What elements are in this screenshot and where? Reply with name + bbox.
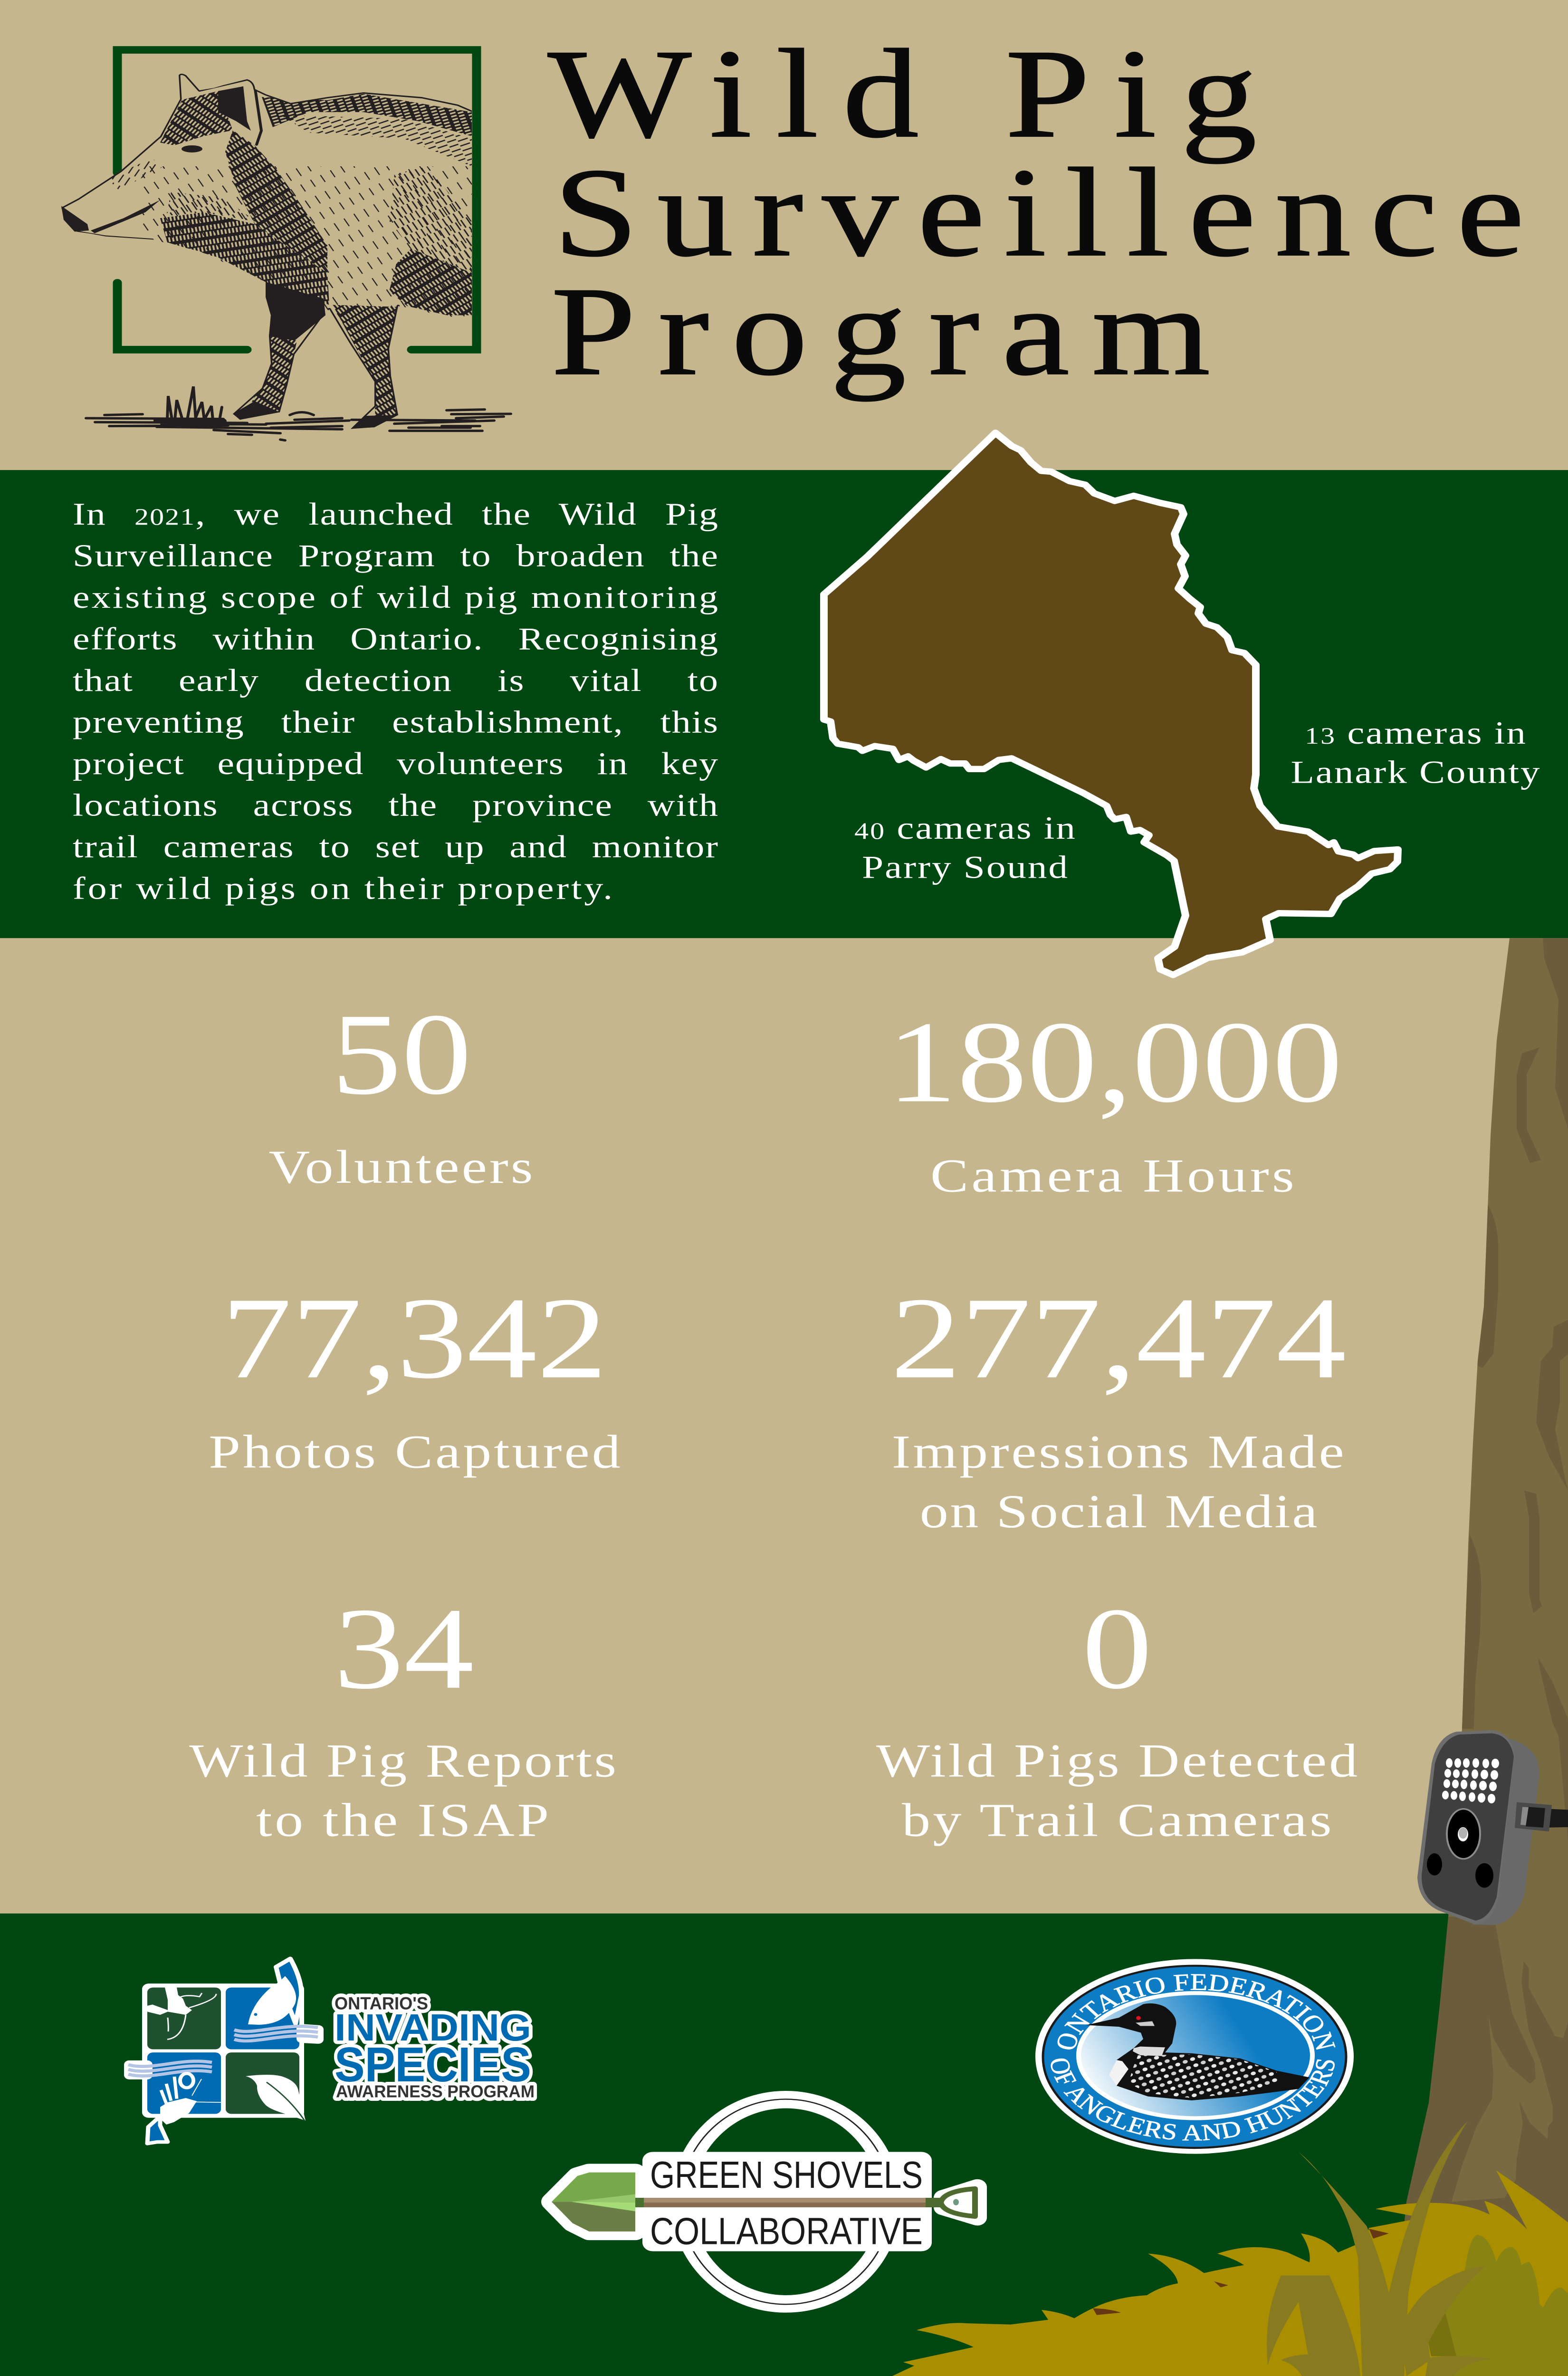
stat: photos captured [209,1273,623,1478]
stat: photos captured: 77,342 [221,1273,607,1403]
stat: social media impressions: 277,474 [891,1273,1346,1403]
introduction paragraph: that early detection is vital to [73,662,719,698]
stat: wild pigs detected [876,1584,1360,1846]
GSC wordmark [650,2154,923,2252]
title: Program [551,261,1210,402]
pig: front leg hatching [252,336,297,412]
grass: brown spots [1093,2229,1389,2315]
introduction paragraph: trail cameras to set up and monitor [73,829,719,864]
map label: Parry Sound: 40 cameras in [854,811,1077,846]
camera sensors [1427,1853,1493,1887]
ISAP wordmark: INVADING [335,2006,531,2049]
wild pig [61,74,472,429]
logo: Ontario Federation of Anglers and Hunters [1035,1959,1354,2154]
pig: rump hatching [390,166,472,273]
trail camera [1417,1730,1568,1925]
GSC ring [680,2099,891,2304]
stat: wild pigs detected: by Trail Cameras [902,1794,1334,1846]
ISAP wordmark: ONTARIO'S [335,1993,428,2013]
panel: introduction band [0,470,1568,938]
stat: social media impressions: Impressions Made [892,1426,1346,1478]
pig: scattered body hair [143,166,472,317]
pig: mane hatching [225,130,327,273]
OFAH circular lettering [1043,1969,1342,2146]
camera strap [1548,1809,1568,1828]
pig: back hatching [262,94,472,136]
grass: tall blades [1267,2121,1492,2376]
stat: volunteers: 50 [332,989,471,1119]
stat: wild pigs detected: 0 [1082,1584,1152,1713]
title: Surveillence [554,142,1524,283]
pig: tusk [118,202,131,218]
frame [117,50,477,350]
stat: social media impressions: on Social Media [920,1485,1319,1538]
ISAP wordmark [335,1993,535,2101]
grass [892,2121,1568,2376]
camera lens [1447,1809,1480,1859]
logo: Ontario's Invading Species Awareness Program [128,1959,535,2144]
camera face [1422,1734,1514,1921]
GSC text plate [642,2152,932,2251]
map label: Lanark County: 13 cameras in [1305,716,1527,751]
pig: muzzle hatching [107,158,164,190]
GSC wordmark: COLLABORATIVE [650,2210,923,2252]
stat: wild pigs detected: Wild Pigs Detected [876,1734,1360,1787]
introduction paragraph: project equipped volunteers in key [73,746,719,781]
introduction paragraph: efforts within Ontario. Recognising [73,621,719,656]
introduction paragraph: Surveillance Program to broaden the [73,538,719,573]
pig: upper back hair [280,115,472,166]
emblem: leaf [246,2075,306,2120]
camera strap buckle [1515,1802,1552,1831]
map label: Lanark County: Lanark County [1291,755,1541,790]
icon: loon [1086,2003,1310,2100]
pig: jaw hatching [166,192,257,222]
panel: partners band [0,1914,1568,2376]
camera front bezel [1417,1730,1514,1924]
wild pig illustration and frame [61,50,511,441]
stat: camera hours [887,997,1342,1202]
OFAH circular lettering: ONTARIO FEDERATION [1049,1969,1342,2053]
pig: beard and chest hatching [160,212,329,305]
title: Wild Pig [548,23,1257,164]
introduction paragraph: In 2021, we launched the Wild Pig [73,496,719,532]
introduction paragraph: existing scope of wild pig monitoring [73,579,719,615]
introduction paragraph: for wild pigs on their property. [73,871,615,906]
statistics [189,989,1360,1846]
introduction paragraph [73,496,719,906]
emblem: crayfish [147,2073,221,2144]
pig: flank hatching [389,249,472,315]
stat: camera hours: 180,000 [887,997,1342,1127]
pig: rear leg hatching [333,305,399,426]
camera infrared LEDs [1442,1758,1499,1803]
map of Ontario [824,433,1398,975]
GSC wordmark: GREEN SHOVELS [650,2154,923,2196]
introduction paragraph: locations across the province with [73,787,719,823]
emblem: lower waves [128,2061,212,2076]
pig: outlines [61,74,472,429]
emblem: upper waves [234,2026,318,2041]
stat: wild pig reports: 34 [334,1584,474,1713]
tree trunk [1405,938,1568,2230]
GSC shovel [552,2173,977,2232]
grass: olive patch [1444,2235,1568,2376]
stat: volunteers: Volunteers [269,1140,535,1193]
ground with grass tuft [86,386,511,441]
emblem: beetle [147,1987,216,2040]
stat: volunteers [269,989,535,1193]
OFAH circular lettering: OF ANGLERS AND HUNTERS [1043,2055,1341,2146]
grass: darker olive patch [1428,2306,1456,2356]
stat: camera hours: Camera Hours [930,1150,1297,1202]
emblem: fish [248,1959,301,2025]
ISAP wordmark: AWARENESS PROGRAM [336,2082,535,2101]
logo: Green Shovels Collaborative [552,2099,977,2304]
stat: wild pig reports: Wild Pig Reports [189,1734,619,1787]
map label: Parry Sound: Parry Sound [862,850,1069,885]
stat: wild pig reports [189,1584,619,1846]
pig: head and ear hatching [160,91,233,145]
title [548,23,1524,402]
introduction paragraph: preventing their establishment, this [73,704,719,739]
camera side housing [1473,1736,1539,1925]
stat: wild pig reports: to the ISAP [256,1794,552,1846]
stat: social media impressions [891,1273,1346,1538]
stat: photos captured: Photos Captured [209,1426,623,1478]
grass: main tuft [892,2171,1568,2376]
ISAP emblem [128,1959,318,2144]
ISAP wordmark: SPECIES [335,2038,531,2092]
pig: dark fills [61,86,398,429]
